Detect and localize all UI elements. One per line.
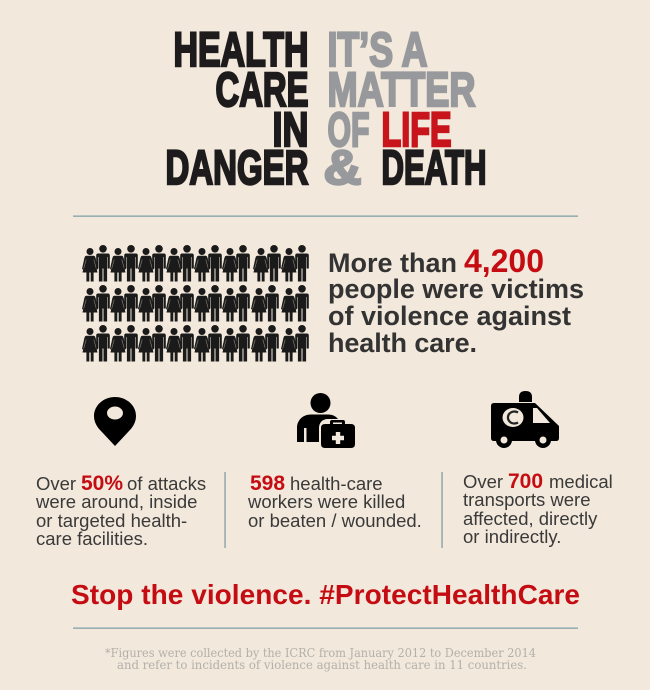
text block: facilities statistic: care facilities. — [36, 528, 148, 549]
text block: medical transports statistic — [463, 470, 613, 547]
headline: more than 4,200 victims: of violence against — [328, 301, 571, 331]
text block: health-care workers statistic: health-care — [290, 473, 383, 494]
title: Health Care in Danger: HEALTH — [174, 24, 308, 77]
text block: health-care workers statistic — [247, 472, 422, 531]
title: It's a matter of life and death: MATTER — [328, 64, 476, 117]
pictogram: rows of people — [82, 245, 309, 362]
title: It's a matter of life and death: OF — [328, 104, 370, 157]
text block: facilities statistic: of attacks — [127, 473, 206, 494]
icon: ambulance — [491, 391, 559, 448]
text block: medical transports statistic: 700 — [508, 470, 543, 493]
headline: more than 4,200 victims: people were victims — [328, 274, 584, 304]
headline: more than 4,200 victims: health care. — [328, 328, 477, 358]
text block: facilities statistic — [35, 472, 206, 549]
title: Health Care in Danger: DANGER — [166, 142, 308, 195]
text block: medical transports statistic: medical — [549, 471, 613, 492]
headline: more than 4,200 victims: 4,200 — [464, 243, 544, 279]
text block: medical transports statistic: affected, directly — [463, 508, 598, 529]
call to action: Stop the violence. #ProtectHealthCare — [71, 579, 580, 610]
title: It's a matter of life and death: DEATH — [382, 142, 486, 195]
text block: facilities statistic: 50% — [81, 472, 123, 495]
text block: medical transports statistic: or indirectly. — [463, 526, 561, 547]
text block: medical transports statistic: transports were — [463, 489, 590, 510]
title: It's a matter of life and death: & — [324, 142, 362, 195]
title: Health Care in Danger: IN — [272, 104, 308, 157]
text block: facilities statistic: were around, inside — [35, 491, 197, 512]
footnote: *Figures were collected by the ICRC from January 2012 to December 2014 — [105, 645, 536, 660]
footnote: and refer to incidents of violence against health care in 11 countries. — [117, 657, 527, 672]
text block: health-care workers statistic: workers were killed — [247, 491, 405, 512]
title: Health Care in Danger: CARE — [216, 64, 308, 117]
icon: location pin — [94, 397, 136, 446]
text block: facilities statistic: Over — [36, 473, 76, 494]
title: It's a matter of life and death: LIFE — [382, 104, 452, 157]
text block: health-care workers statistic: or beaten / wounded. — [248, 510, 422, 531]
headline: more than 4,200 victims — [328, 243, 584, 358]
title: Health Care in Danger — [166, 24, 308, 195]
text block: health-care workers statistic: 598 — [250, 472, 285, 495]
title: It's a matter of life and death — [324, 24, 486, 195]
icon: health worker with first-aid kit — [297, 393, 355, 448]
footnote — [105, 645, 536, 672]
text block: medical transports statistic: Over — [463, 471, 503, 492]
text block: facilities statistic: or targeted health- — [36, 510, 187, 531]
headline: more than 4,200 victims: More than — [328, 248, 457, 278]
title: It's a matter of life and death: IT’S A — [328, 24, 428, 77]
